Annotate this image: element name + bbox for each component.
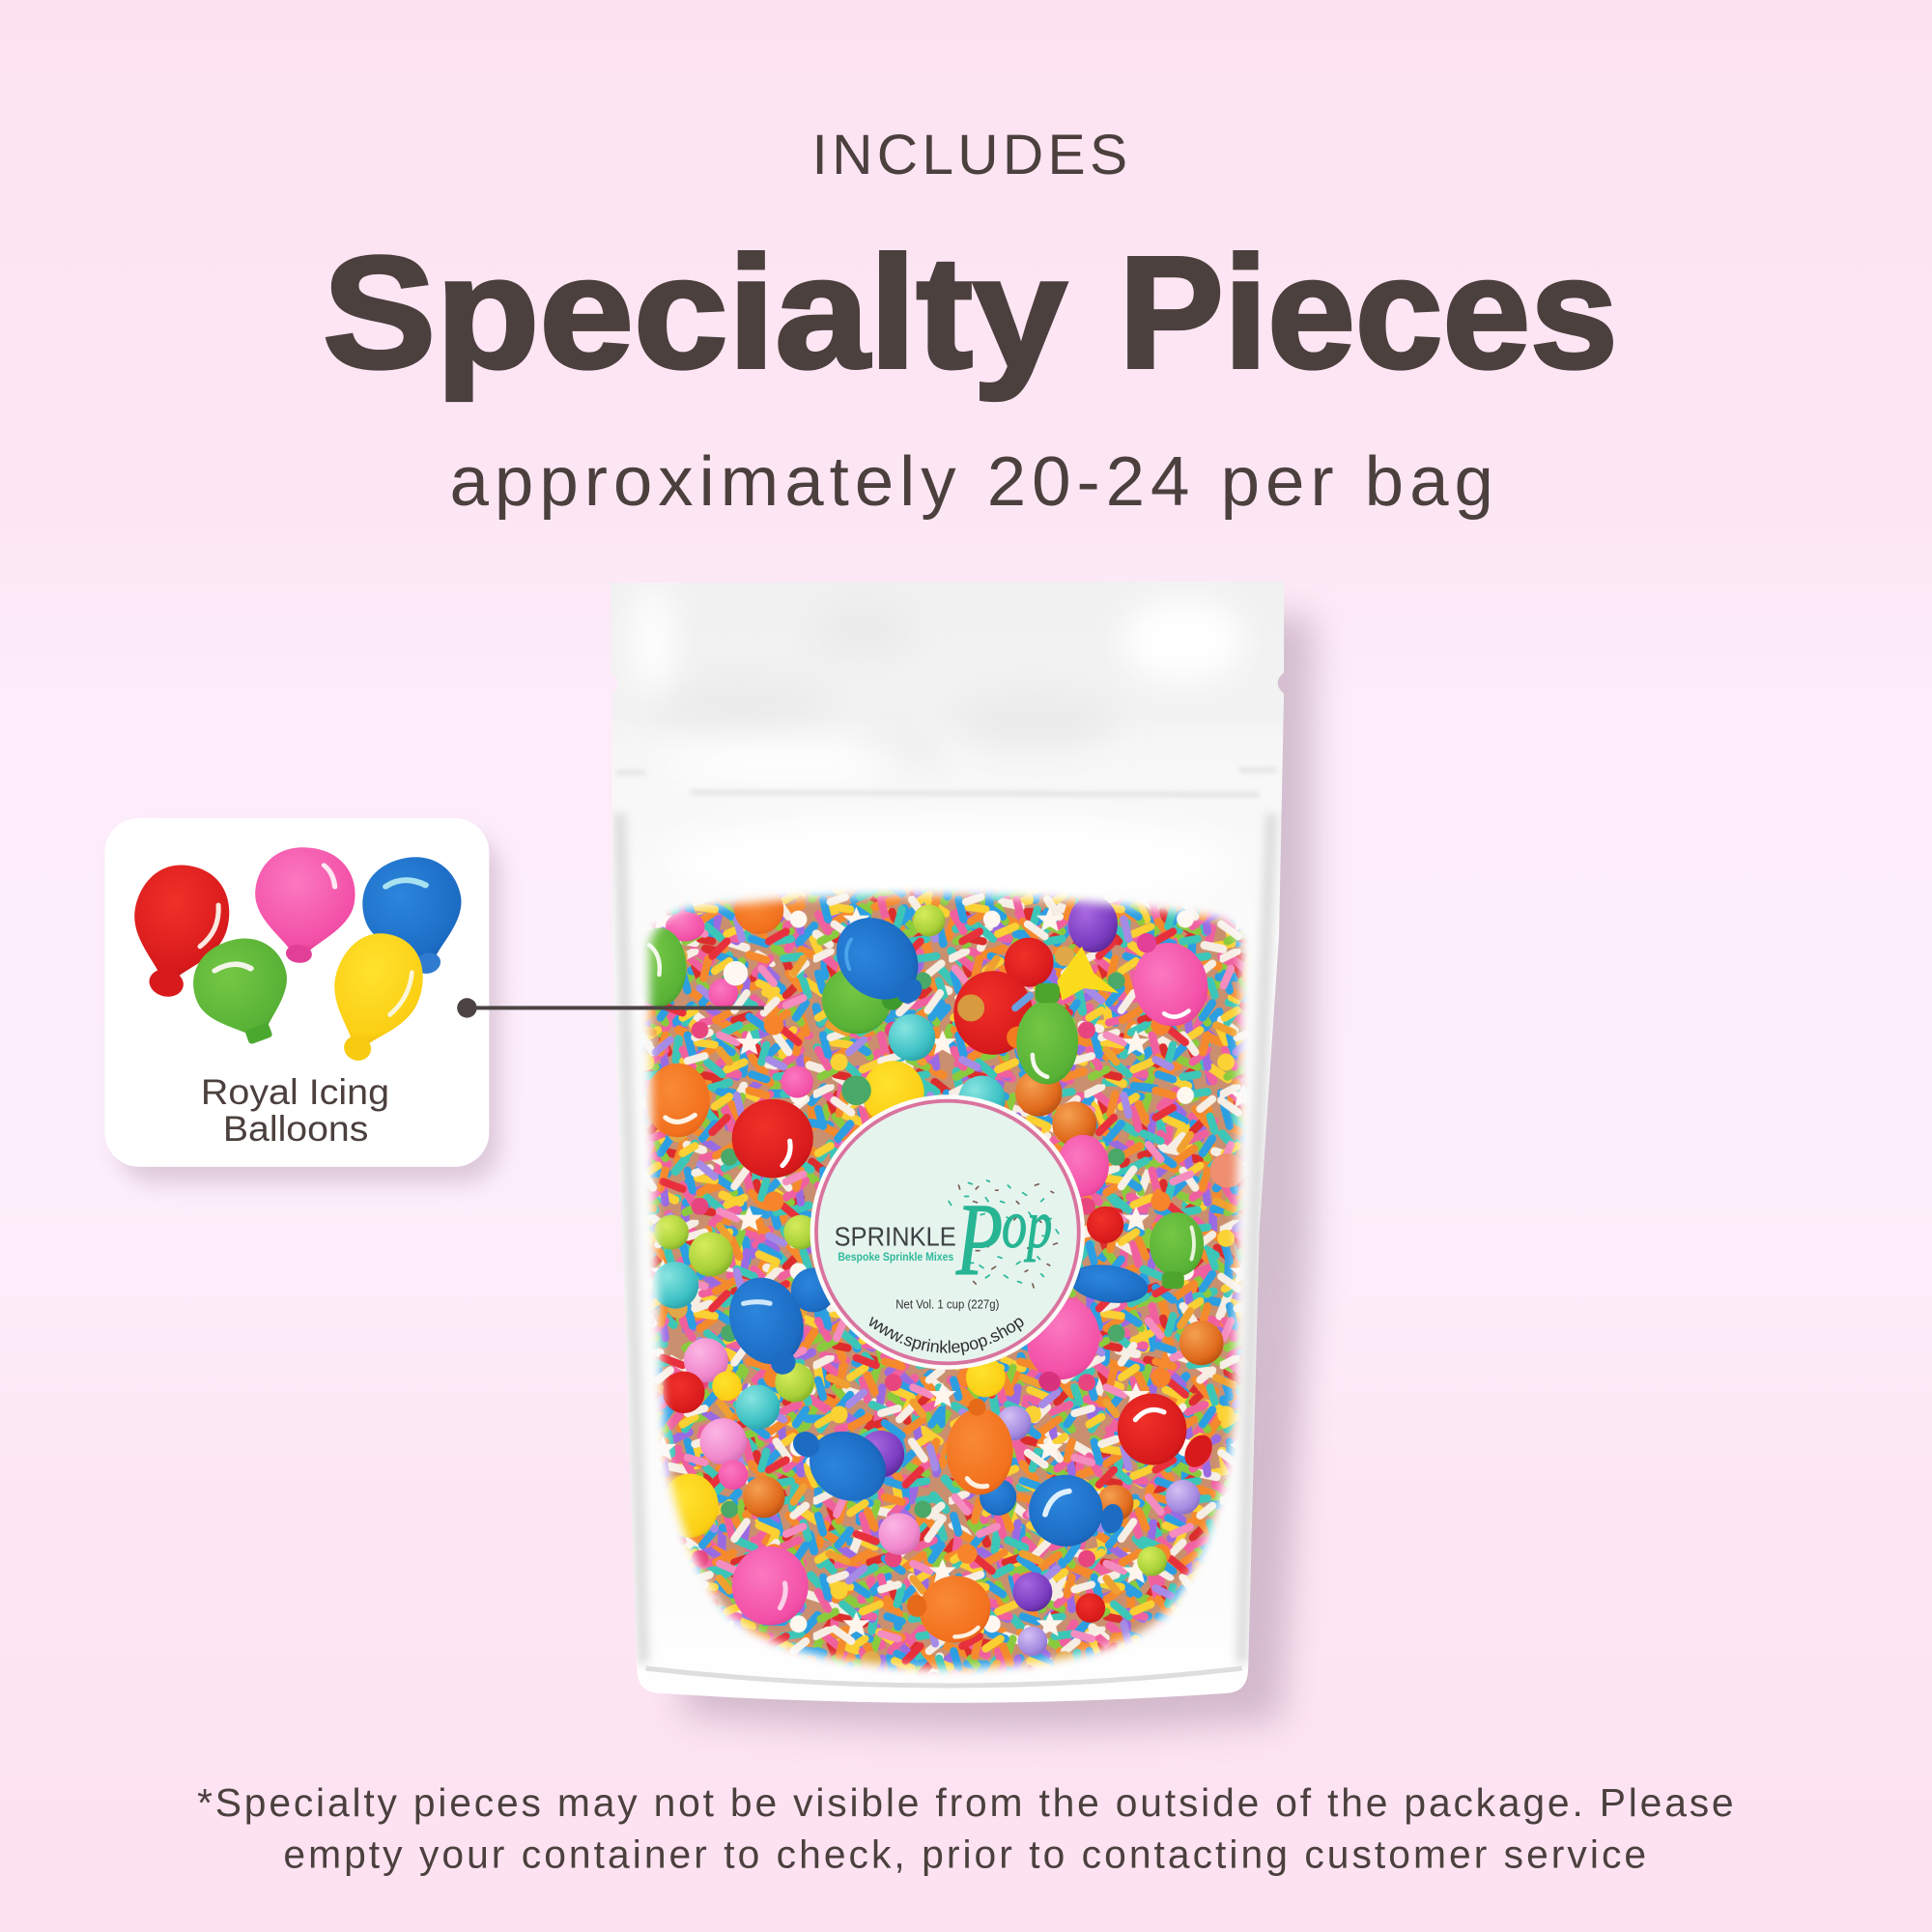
bag film shading bbox=[616, 585, 1276, 1686]
tagline: Bespoke Sprinkle Mixes bbox=[838, 1251, 954, 1264]
footnote bbox=[197, 1780, 1734, 1877]
icon: yellow balloon bbox=[313, 923, 436, 1073]
label disc bbox=[810, 1094, 1085, 1370]
icon: pink balloon bbox=[248, 842, 359, 968]
round candy pearls bbox=[652, 885, 1244, 1656]
bag shadow bbox=[653, 616, 1314, 1731]
brand script pop: P bbox=[955, 1183, 1003, 1297]
panel: royal icing balloons callout bbox=[104, 818, 764, 1182]
bag body bbox=[611, 582, 1284, 1703]
card label: Balloons bbox=[223, 1109, 368, 1149]
brand script pop: op bbox=[1002, 1186, 1052, 1263]
sprinkle pile bbox=[616, 881, 1269, 1694]
footnote: *Specialty pieces may not be visible from the outside of the package. Please bbox=[197, 1780, 1734, 1825]
icing balloons in the mix bbox=[632, 901, 1222, 1650]
heading: includes: INCLUDES bbox=[812, 124, 1127, 186]
callout connector arrow bbox=[457, 998, 764, 1018]
footnote: empty your container to check, prior to contacting customer service bbox=[283, 1833, 1646, 1877]
title: Pieces bbox=[1119, 223, 1618, 401]
icon: blue balloon bbox=[353, 846, 478, 986]
confetti dots bbox=[949, 1180, 1059, 1283]
card label bbox=[201, 1072, 389, 1149]
icon: red balloon bbox=[118, 856, 239, 1007]
card label: Royal Icing bbox=[201, 1072, 389, 1112]
seal label: www.sprinklepop.shop bbox=[869, 1316, 1024, 1355]
panel: product bag bbox=[611, 582, 1329, 1746]
card bbox=[104, 818, 489, 1167]
bag side folds bbox=[620, 813, 1271, 1663]
bag bottom fold bbox=[645, 1668, 1242, 1686]
title bbox=[323, 223, 1618, 401]
net volume: Net Vol. 1 cup (227g) bbox=[895, 1298, 999, 1312]
card shadow bbox=[118, 836, 500, 1182]
yellow candy star bbox=[1057, 947, 1119, 1001]
subtitle: approximately 20-24 per bag bbox=[450, 442, 1493, 521]
title: Specialty bbox=[323, 223, 1067, 401]
seal label bbox=[810, 1094, 1085, 1370]
brand script pop bbox=[955, 1183, 1052, 1297]
icon: green balloon bbox=[182, 926, 305, 1057]
website bbox=[867, 1323, 1026, 1353]
brand wordmark: SPRINKLE bbox=[835, 1222, 956, 1252]
bag zip seal bbox=[616, 770, 1276, 795]
